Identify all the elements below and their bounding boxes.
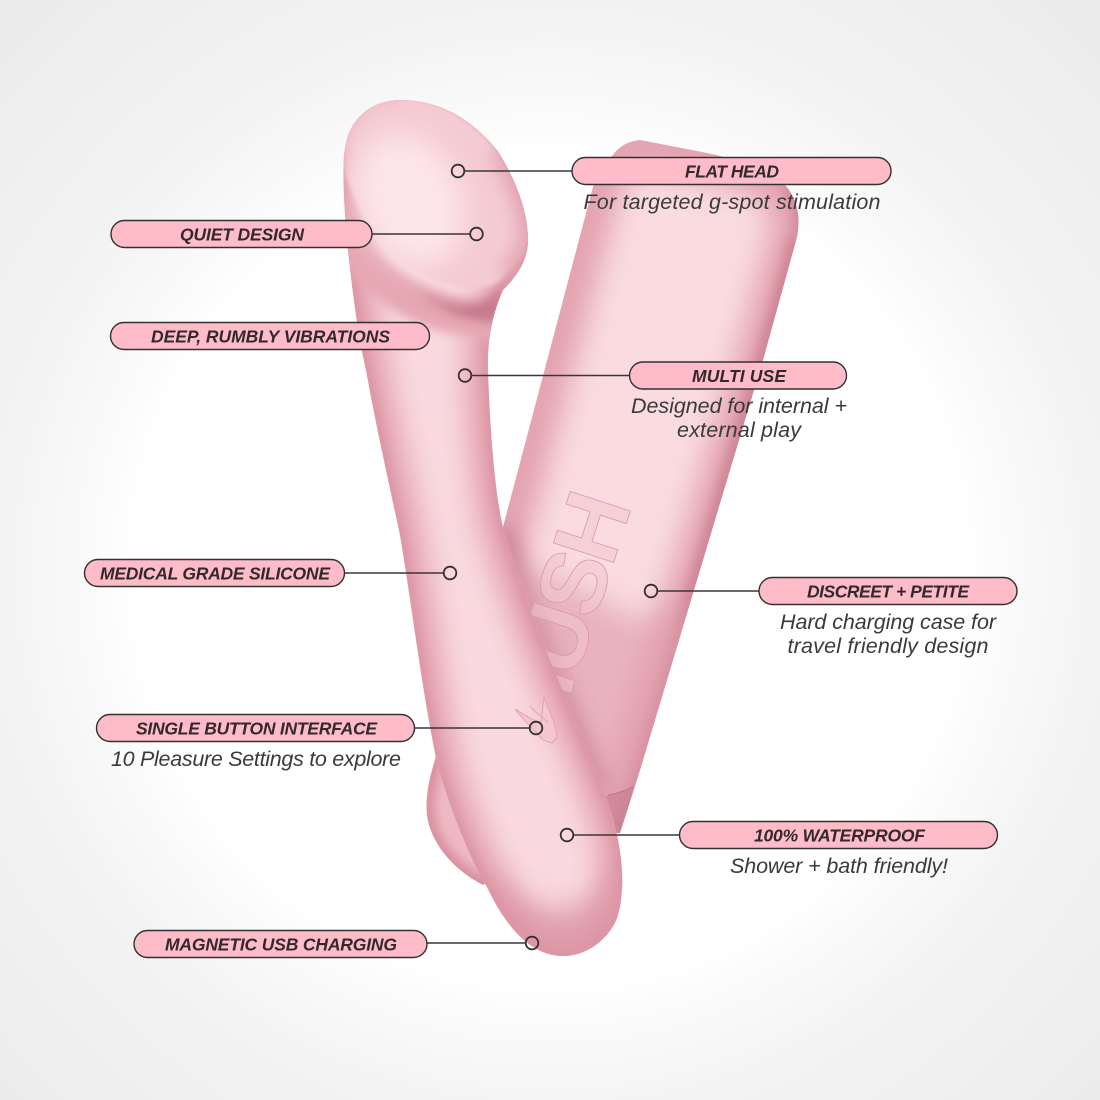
callout: single button interface	[96, 714, 542, 771]
callout: flat head: FLAT HEAD	[685, 162, 779, 182]
callout: discreet + petite: travel friendly design	[788, 634, 988, 658]
flat head face	[345, 98, 528, 288]
callout: multi use: Designed for internal +	[631, 394, 847, 418]
callout: discreet + petite: DISCREET + PETITE	[807, 582, 970, 602]
callout: quiet design: QUIET DESIGN	[180, 224, 304, 244]
callout: discreet + petite: Hard charging case for	[780, 610, 997, 634]
rear lobe	[426, 757, 484, 885]
case seam	[606, 787, 634, 833]
callout: flat head	[452, 158, 891, 214]
callout: waterproof: Shower + bath friendly!	[730, 854, 948, 878]
callout: waterproof: 100% WATERPROOF	[754, 826, 926, 846]
callout: multi use: external play	[677, 418, 802, 442]
callout: magnetic usb charging: MAGNETIC USB CHARGING	[165, 934, 397, 954]
button emboss	[515, 697, 557, 743]
callout: quiet design	[111, 220, 483, 248]
callout: medical grade silicone: MEDICAL GRADE SILICONE	[100, 564, 331, 584]
callout: flat head: For targeted g-spot stimulation	[584, 190, 880, 214]
neck shadow	[346, 214, 499, 340]
callout: discreet + petite	[645, 578, 1017, 658]
lower shading	[494, 876, 622, 956]
product illustration	[330, 90, 810, 980]
callout: waterproof	[561, 822, 998, 878]
callout: magnetic usb charging	[134, 930, 538, 958]
callout: multi use	[459, 362, 847, 442]
callout: deep vibrations	[110, 322, 430, 350]
callout: multi use: MULTI USE	[692, 366, 787, 386]
callout: single button interface: 10 Pleasure Settings to explore	[111, 747, 401, 771]
charging case	[503, 140, 798, 833]
callout: medical grade silicone	[84, 560, 456, 586]
callout: deep vibrations: DEEP, RUMBLY VIBRATIONS	[151, 326, 390, 346]
wand	[343, 100, 622, 956]
callout: single button interface: SINGLE BUTTON INTERFACE	[136, 718, 378, 738]
embossed logo: HUSH	[479, 480, 651, 744]
